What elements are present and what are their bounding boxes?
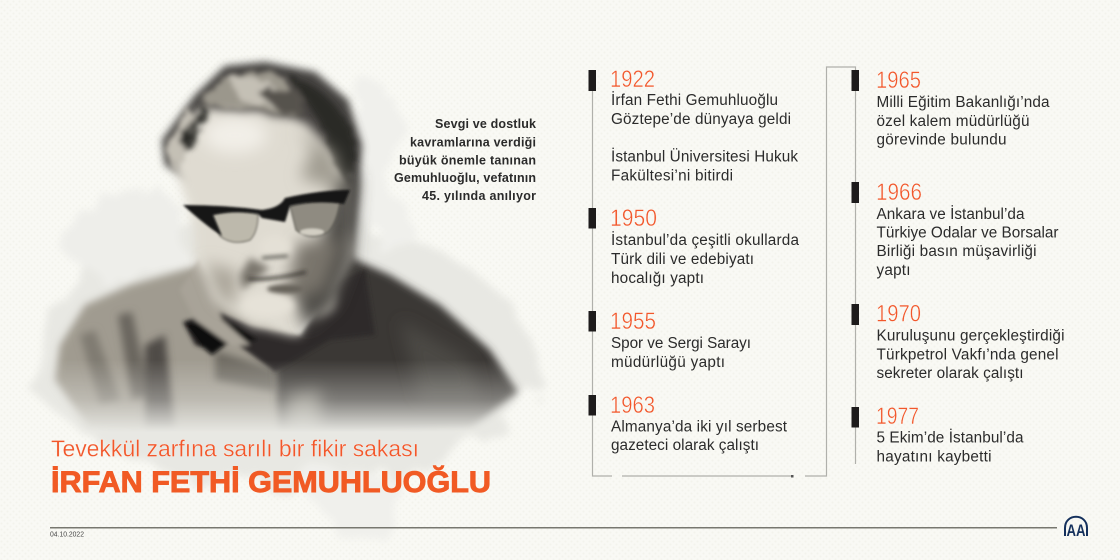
arrow tip on connector [791, 475, 794, 478]
chin and nose shading [240, 235, 294, 317]
entry 1950: 1950 [610, 205, 657, 232]
entry 1922: İrfan Fethi Gemuhluoğlu [611, 91, 778, 109]
face shading [203, 117, 358, 330]
face [172, 108, 352, 335]
hair back [162, 62, 362, 265]
entry 1970: Türkpetrol Vakfı’nda genel [876, 346, 1058, 364]
entry 1955: Spor ve Sergi Sarayı [611, 335, 751, 352]
entry 1966: 1966 [876, 179, 922, 206]
entry 1966: Birliği basın müşavirliği [876, 243, 1036, 260]
entry 1955 [588, 308, 751, 371]
entry 1970: 1970 [876, 300, 921, 328]
intro text: Gemuhluoğlu, vefatının [394, 171, 536, 185]
entry 1966: Ankara ve İstanbul’da [876, 205, 1025, 223]
mouth [248, 256, 306, 294]
frame [183, 190, 350, 236]
entry 1965: görevinde bulundu [876, 132, 1006, 148]
footer rule [50, 527, 1057, 528]
entry 1950: Türk dili ve edebiyatı [611, 251, 754, 268]
left lens [212, 211, 258, 242]
entry 1977: 5 Ekim’de İstanbul’da [876, 428, 1024, 446]
entry 1966: yaptı [876, 262, 910, 279]
intro text [394, 117, 536, 203]
icon: AA logo [1065, 517, 1087, 540]
timeline connector lines [592, 67, 856, 476]
entry 1922: 1922 [610, 66, 655, 93]
sweater, left side [51, 262, 290, 427]
date: 04.10.2022 [50, 530, 84, 538]
portrait: İrfan Fethi Gemuhluoğlu [55, 62, 518, 450]
entry 1963: 1963 [610, 392, 655, 419]
entry 1950: İstanbul’da çeşitli okullarda [611, 231, 799, 249]
entry 1970 [852, 300, 1064, 382]
main title: İRFAN FETHİ GEMUHLUOĞLU [51, 465, 491, 499]
hair streaks [165, 72, 356, 190]
entry 1966: Türkiye Odalar ve Borsalar [876, 224, 1058, 242]
entry 1965 [852, 67, 1050, 148]
entry 1955: müdürlüğü yaptı [611, 354, 725, 371]
entry 1922: Fakültesi’ni bitirdi [611, 168, 733, 184]
entry 1922: İstanbul Üniversitesi Hukuk [611, 148, 798, 166]
sweater, left shading [80, 312, 275, 430]
watercolor wash behind portrait [35, 80, 550, 540]
entry 1922: Göztepe’de dünyaya geldi [611, 111, 791, 128]
icon: AA logo: AA [1066, 521, 1086, 540]
entry 1977: hayatını kaybetti [876, 448, 992, 466]
entry 1922 [588, 66, 798, 184]
intro text: kavramlarına verdiği [410, 136, 536, 150]
entry 1977: 1977 [876, 403, 919, 430]
intro text: büyük önemle tanınan [399, 154, 536, 168]
sweater, right highlights [282, 328, 474, 426]
timeline column 1 [588, 66, 799, 454]
sweater, right side [275, 255, 518, 440]
entry 1950 [588, 205, 799, 287]
entry 1963 [588, 392, 788, 454]
subtitle: Tevekkül zarfına sarılı bir fikir sakası [51, 436, 419, 462]
entry 1965: özel kalem müdürlüğü [876, 113, 1030, 130]
intro text: Sevgi ve dostluk [435, 117, 536, 131]
entry 1963: gazeteci olarak çalıştı [611, 437, 759, 454]
entry 1955: 1955 [610, 308, 656, 335]
entry 1963: Almanya’da iki yıl serbest [611, 418, 788, 436]
right lens [290, 200, 340, 237]
glasses [183, 190, 350, 242]
timeline column 2 [852, 67, 1064, 466]
entry 1966 [852, 179, 1058, 279]
entry 1970: sekreter olarak çalıştı [876, 365, 1024, 382]
entry 1965: 1965 [876, 67, 921, 94]
entry 1950: hocalığı yaptı [611, 270, 704, 287]
neck and collar [180, 258, 375, 372]
entry 1965: Milli Eğitim Bakanlığı’nda [876, 94, 1050, 111]
entry 1977 [852, 403, 1024, 466]
intro text: 45. yılında anılıyor [422, 189, 536, 203]
entry 1970: Kuruluşunu gerçekleştirdiği [876, 328, 1064, 344]
